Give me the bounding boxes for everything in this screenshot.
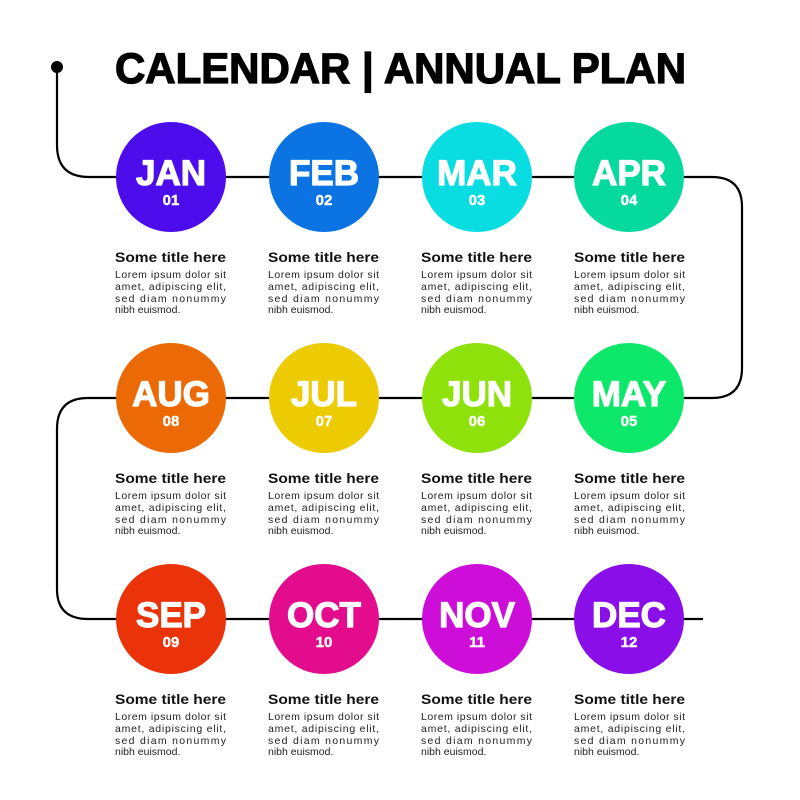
month: MAY: MAY <box>592 375 666 414</box>
text block row 3 col 3 <box>421 691 533 758</box>
text block row 3 col 2: Some title here <box>268 691 379 707</box>
month: JUL: JUL <box>291 375 357 414</box>
text block row 2 col 1: nibh euismod. <box>115 525 180 537</box>
month: JUL <box>269 343 379 453</box>
text block row 3 col 4 <box>574 691 686 758</box>
text block row 1 col 3: nibh euismod. <box>421 304 486 316</box>
month: MAY <box>574 343 684 453</box>
text block row 2 col 4: amet, adipiscing elit, <box>574 502 685 514</box>
text block row 3 col 1 <box>115 691 227 758</box>
month: FEB: FEB <box>289 154 359 193</box>
text block row 2 col 1: Lorem ipsum dolor sit <box>115 490 226 502</box>
month: APR: APR <box>592 154 666 193</box>
text block row 2 col 2: amet, adipiscing elit, <box>268 502 379 514</box>
month: OCT: OCT <box>287 596 361 635</box>
text block row 1 col 2 <box>268 249 380 316</box>
month: OCT <box>269 564 379 674</box>
text block row 1 col 1: sed diam nonummy <box>115 293 227 305</box>
month: DEC: 12 <box>621 634 637 651</box>
text block row 2 col 2: sed diam nonummy <box>268 514 380 526</box>
text block row 2 col 4 <box>574 470 686 537</box>
month: JUN: 06 <box>469 413 485 430</box>
text block row 3 col 1: sed diam nonummy <box>115 735 227 747</box>
text block row 3 col 3: Some title here <box>421 691 532 707</box>
text block row 2 col 3: Lorem ipsum dolor sit <box>421 490 532 502</box>
text block row 2 col 3: amet, adipiscing elit, <box>421 502 532 514</box>
month: MAY: 05 <box>621 413 637 430</box>
month: SEP: SEP <box>136 596 206 635</box>
text block row 2 col 2: Some title here <box>268 470 379 486</box>
text block row 1 col 3: Some title here <box>421 249 532 265</box>
text block row 1 col 4: amet, adipiscing elit, <box>574 281 685 293</box>
month: AUG: 08 <box>163 413 179 430</box>
text block row 2 col 1: amet, adipiscing elit, <box>115 502 226 514</box>
month: MAR: MAR <box>437 154 517 193</box>
month: JAN: JAN <box>136 154 206 193</box>
text block row 1 col 3 <box>421 249 533 316</box>
month: MAR <box>422 122 532 232</box>
month: OCT: 10 <box>316 634 332 651</box>
text block row 3 col 4: nibh euismod. <box>574 746 639 758</box>
text block row 3 col 1: Lorem ipsum dolor sit <box>115 711 226 723</box>
month: DEC <box>574 564 684 674</box>
text block row 3 col 4: amet, adipiscing elit, <box>574 723 685 735</box>
text block row 3 col 2 <box>268 691 380 758</box>
text block row 2 col 2 <box>268 470 380 537</box>
text block row 1 col 1: amet, adipiscing elit, <box>115 281 226 293</box>
text block row 1 col 3: amet, adipiscing elit, <box>421 281 532 293</box>
month: FEB: 02 <box>316 192 332 209</box>
title: CALENDAR | ANNUAL PLAN <box>115 45 686 93</box>
month: APR <box>574 122 684 232</box>
month: APR: 04 <box>621 192 638 209</box>
text block row 2 col 2: Lorem ipsum dolor sit <box>268 490 379 502</box>
month: SEP <box>116 564 226 674</box>
text block row 3 col 3: amet, adipiscing elit, <box>421 723 532 735</box>
text block row 1 col 1: nibh euismod. <box>115 304 180 316</box>
text block row 2 col 1: sed diam nonummy <box>115 514 227 526</box>
text block row 3 col 1: Some title here <box>115 691 226 707</box>
month: DEC: DEC <box>592 596 666 635</box>
text block row 1 col 4: nibh euismod. <box>574 304 639 316</box>
month: NOV <box>422 564 532 674</box>
text block row 3 col 2: sed diam nonummy <box>268 735 380 747</box>
text block row 1 col 1: Some title here <box>115 249 226 265</box>
text block row 1 col 3: Lorem ipsum dolor sit <box>421 269 532 281</box>
text block row 2 col 4: sed diam nonummy <box>574 514 686 526</box>
text block row 1 col 2: Lorem ipsum dolor sit <box>268 269 379 281</box>
month: NOV: NOV <box>439 596 516 635</box>
text block row 2 col 4: nibh euismod. <box>574 525 639 537</box>
text block row 1 col 4: Some title here <box>574 249 685 265</box>
text block row 3 col 4: sed diam nonummy <box>574 735 686 747</box>
text block row 3 col 1: nibh euismod. <box>115 746 180 758</box>
text block row 3 col 3: nibh euismod. <box>421 746 486 758</box>
month: MAR: 03 <box>469 192 485 209</box>
text block row 1 col 2: Some title here <box>268 249 379 265</box>
text block row 1 col 4 <box>574 249 686 316</box>
month: SEP: 09 <box>163 634 179 651</box>
text block row 1 col 4: sed diam nonummy <box>574 293 686 305</box>
month: JAN: 01 <box>163 192 179 209</box>
text block row 1 col 3: sed diam nonummy <box>421 293 533 305</box>
timeline path <box>51 61 742 619</box>
text block row 3 col 2: Lorem ipsum dolor sit <box>268 711 379 723</box>
text block row 2 col 1: Some title here <box>115 470 226 486</box>
text block row 1 col 2: sed diam nonummy <box>268 293 380 305</box>
month: JUN: JUN <box>442 375 512 414</box>
text block row 2 col 2: nibh euismod. <box>268 525 333 537</box>
text block row 3 col 4: Some title here <box>574 691 685 707</box>
month: JAN <box>116 122 226 232</box>
month: JUL: 07 <box>316 413 332 430</box>
month: NOV: 11 <box>469 634 485 651</box>
text block row 1 col 4: Lorem ipsum dolor sit <box>574 269 685 281</box>
text block row 2 col 3: Some title here <box>421 470 532 486</box>
text block row 1 col 2: amet, adipiscing elit, <box>268 281 379 293</box>
text block row 2 col 4: Lorem ipsum dolor sit <box>574 490 685 502</box>
text block row 3 col 4: Lorem ipsum dolor sit <box>574 711 685 723</box>
text block row 2 col 4: Some title here <box>574 470 685 486</box>
text block row 3 col 2: amet, adipiscing elit, <box>268 723 379 735</box>
text block row 1 col 1: Lorem ipsum dolor sit <box>115 269 226 281</box>
month: FEB <box>269 122 379 232</box>
text block row 3 col 1: amet, adipiscing elit, <box>115 723 226 735</box>
text block row 3 col 3: sed diam nonummy <box>421 735 533 747</box>
text block row 1 col 2: nibh euismod. <box>268 304 333 316</box>
text block row 2 col 3 <box>421 470 533 537</box>
month: AUG: AUG <box>132 375 210 414</box>
text block row 3 col 2: nibh euismod. <box>268 746 333 758</box>
text block row 2 col 3: nibh euismod. <box>421 525 486 537</box>
month: JUN <box>422 343 532 453</box>
text block row 3 col 3: Lorem ipsum dolor sit <box>421 711 532 723</box>
text block row 1 col 1 <box>115 249 227 316</box>
text block row 2 col 3: sed diam nonummy <box>421 514 533 526</box>
text block row 2 col 1 <box>115 470 227 537</box>
month: AUG <box>116 343 226 453</box>
